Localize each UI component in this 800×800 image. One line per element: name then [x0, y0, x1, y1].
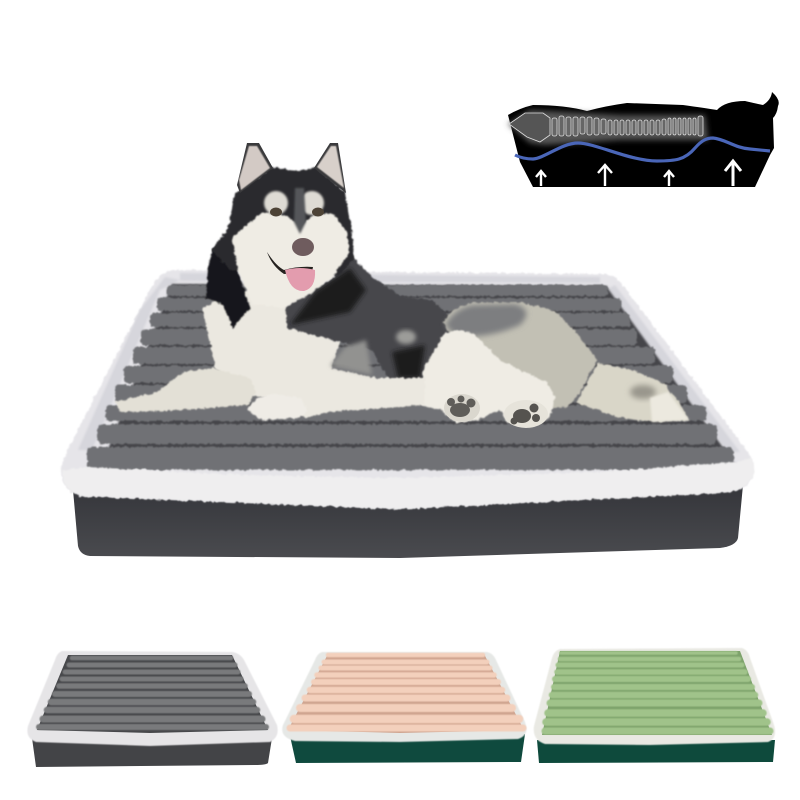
dark back shading	[290, 268, 425, 378]
dog tail	[577, 363, 689, 422]
pelvis bone	[509, 113, 550, 142]
variant: peach bed	[282, 652, 526, 763]
rim side shading	[78, 273, 740, 452]
variant: green bed	[534, 648, 775, 763]
main dog bed	[61, 270, 754, 558]
dog muzzle stripe	[294, 188, 306, 234]
blue support curve	[515, 138, 770, 161]
dog grey flank patch	[330, 340, 372, 375]
peach bed surface	[288, 654, 524, 733]
green bed rim	[534, 648, 775, 745]
dog eyebrow marks	[264, 191, 324, 215]
dog right front paw	[248, 394, 308, 420]
dog haunch	[443, 302, 597, 410]
support arrows	[536, 161, 741, 186]
dog left ear	[237, 143, 273, 193]
dog pale back patch	[396, 330, 416, 344]
dog mouth	[267, 252, 313, 274]
spine support diagram	[508, 92, 779, 187]
dog dark shoulder patch	[206, 240, 250, 328]
green bed surface	[542, 651, 772, 735]
body silhouette	[508, 92, 779, 187]
dog left front leg	[115, 368, 256, 412]
dog white rear leg	[420, 330, 555, 427]
haunch grey shading	[445, 304, 526, 336]
peach bed rim	[282, 652, 526, 742]
grey bed surface	[37, 655, 268, 733]
dog right ear	[314, 143, 346, 193]
bed base side	[73, 485, 743, 558]
peach bed base	[290, 734, 525, 763]
dog eyes	[270, 208, 324, 216]
spine glow	[508, 110, 708, 145]
dog white chest and belly	[202, 290, 425, 418]
dog rear paw pads	[444, 394, 548, 428]
bed plush stripes	[87, 285, 733, 470]
bed front rim	[62, 458, 754, 509]
peach bed stripes	[290, 655, 523, 728]
grey bed rim	[27, 651, 278, 746]
green bed stripes	[545, 653, 770, 731]
variant: grey bed	[27, 651, 278, 767]
bed white rim	[61, 270, 753, 509]
husky dog	[115, 143, 689, 428]
bed grey surface	[88, 284, 735, 470]
dog head dark mask	[212, 167, 354, 275]
grey bed stripes	[39, 658, 266, 727]
vertebrae	[552, 116, 703, 136]
dog nose	[292, 238, 314, 256]
dog tongue	[285, 268, 315, 291]
dog white face	[232, 212, 350, 308]
green bed base	[537, 740, 775, 763]
grey bed base	[32, 738, 272, 767]
dog back and dark coat	[283, 252, 470, 382]
